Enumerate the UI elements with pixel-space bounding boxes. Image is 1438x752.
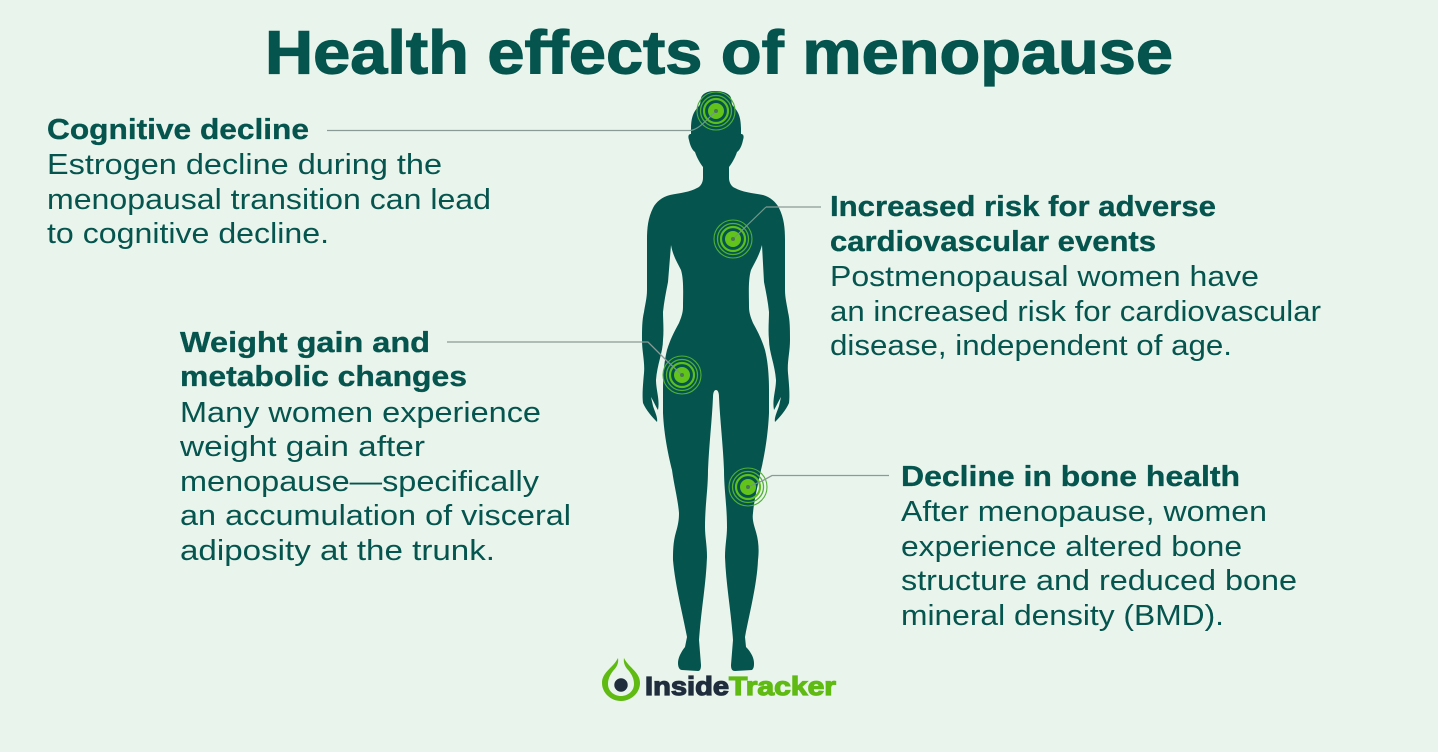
text block: cardiovascular: Increased risk for adverse [830,191,1216,223]
text block: weight gain: Weight gain and [180,327,430,359]
text block: cognitive decline [47,114,491,250]
marker: cognitive decline [327,92,735,130]
marker: bone health [729,468,889,506]
title: Health effects of menopause [265,18,1173,86]
text block: bone health: structure and reduced bone [901,565,1297,597]
text block: weight gain: weight gain after [179,431,425,463]
text block: cardiovascular: an increased risk for cardiovascular [830,296,1321,328]
text block: weight gain: an accumulation of visceral [180,500,571,532]
text block: cognitive decline: to cognitive decline. [47,218,329,250]
text block: cardiovascular [830,191,1321,362]
text block: cardiovascular: Postmenopausal women have [830,261,1259,293]
body silhouette [642,91,790,671]
text block: bone health: mineral density (BMD). [901,600,1224,632]
text block: cognitive decline: Estrogen decline during the [47,149,442,181]
text block: weight gain: Many women experience [180,397,541,429]
text block: weight gain: menopause—specifically [180,466,540,498]
marker: cardiovascular [714,207,821,258]
logo: InsideTracker: Tracker [729,671,836,701]
marker: weight gain [447,342,701,394]
logo: InsideTracker: Inside [645,671,729,701]
text block: weight gain: adiposity at the trunk. [180,535,495,567]
logo: InsideTracker [602,658,836,701]
text block: weight gain: metabolic changes [180,361,467,393]
text block: bone health: experience altered bone [901,531,1242,563]
text block: bone health: After menopause, women [901,496,1267,528]
text block: bone health: Decline in bone health [901,461,1240,493]
icon: drop [602,658,640,701]
text block: cognitive decline: Cognitive decline [47,114,309,146]
text block: cardiovascular: cardiovascular events [830,226,1156,258]
text block: cardiovascular: disease, independent of age. [830,330,1232,362]
text block: bone health [901,461,1297,632]
text block: cognitive decline: menopausal transition can lead [47,184,491,216]
text block: weight gain [179,327,571,567]
